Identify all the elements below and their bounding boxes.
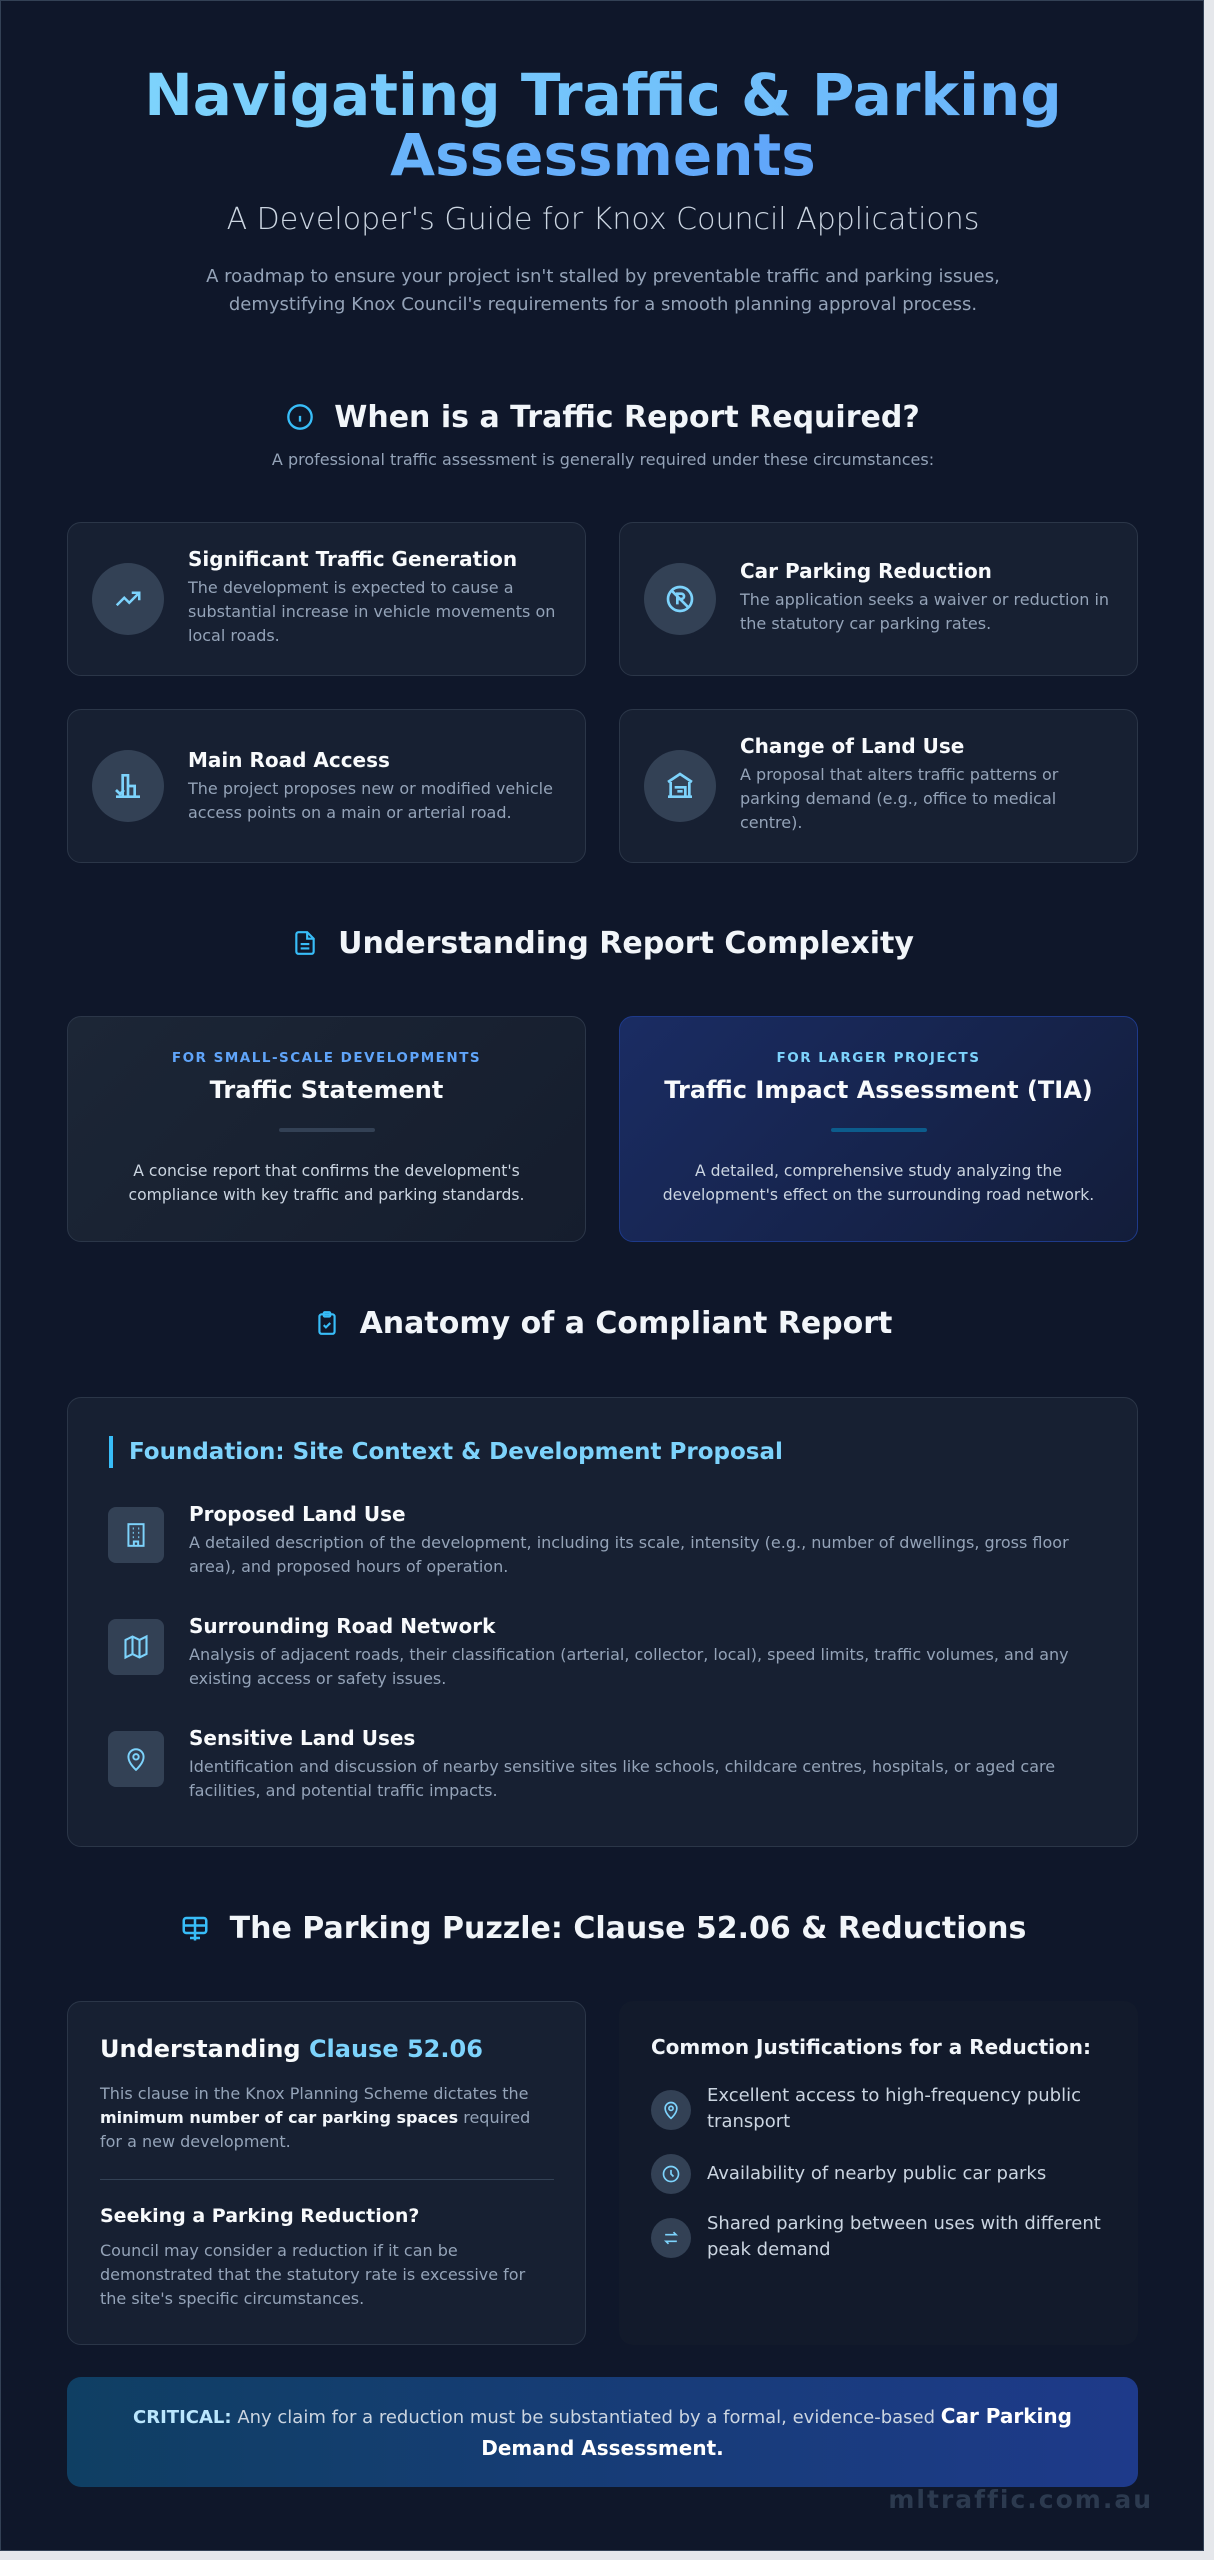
watermark: mltraffic.com.au (888, 2485, 1153, 2514)
panel: traffic impact assessment (619, 1016, 1138, 1242)
heading: when is a traffic report required: When is a Traffic Report Required? (334, 400, 920, 434)
justification: shared parking: Shared parking between uses with different peak demand (707, 2213, 1101, 2260)
icon: building (644, 750, 716, 822)
title (144, 61, 1062, 189)
item: surrounding road network: Surrounding Road Network (189, 1614, 495, 1638)
subtitle: A Developer's Guide for Knox Council Applications (227, 202, 979, 237)
panel: traffic impact assessment: development's effect on the surrounding road network. (663, 1186, 1094, 1204)
panel: foundation (67, 1397, 1138, 1847)
panel: traffic impact assessment: FOR LARGER PROJECTS (776, 1050, 980, 1066)
panel: traffic statement: Traffic Statement (210, 1076, 443, 1104)
card: change of land use: A proposal that alters traffic patterns or parking demand (e.g., office to medical centre). (740, 765, 1058, 832)
card: significant traffic generation: Significant Traffic Generation (188, 547, 517, 571)
panel: traffic statement: A concise report that confirms the development's (133, 1162, 520, 1180)
icon: trend (92, 563, 164, 635)
item: sensitive land uses: Identification and discussion of nearby sensitive sites like schools, childcare centres, hospitals, or aged care facilities, and potential traffic impacts. (189, 1757, 1055, 1800)
card: main road access: The project proposes new or modified vehicle access points on a main or arterial road. (188, 779, 553, 822)
item: surrounding road network: Analysis of adjacent roads, their classification (arterial, collector, local), speed limits, traffic volumes, and any existing access or safety issues. (189, 1645, 1069, 1688)
icon: no parking (644, 563, 716, 635)
panel: understanding clause 52.06 (67, 2001, 586, 2345)
card: car parking reduction (619, 522, 1138, 676)
justification: public transport: Excellent access to high-frequency public transport (707, 2085, 1081, 2132)
item: proposed land use: A detailed description of the development, including its scale, intensity (e.g., number of dwellings, gross floor area), and proposed hours of operation. (189, 1533, 1069, 1576)
item: proposed land use: Proposed Land Use (189, 1502, 406, 1526)
item: proposed land use (189, 1502, 1069, 1576)
title: Navigating Traffic & Parking (144, 61, 1062, 129)
item: sensitive land uses (189, 1726, 1055, 1800)
callout: critical: CRITICAL: Any claim for a reduction must be substantiated by a formal, evidence-based Car Parking Demand Assessment. (133, 2404, 1072, 2460)
icon: proposed land use (108, 1507, 164, 1563)
card: significant traffic generation (67, 522, 586, 676)
panel heading: Foundation: Site Context & Development Proposal (129, 1439, 783, 1465)
panel: traffic impact assessment: A detailed, comprehensive study analyzing the (695, 1162, 1062, 1180)
panel: understanding clause 52.06: Seeking a Parking Reduction? (100, 2205, 419, 2227)
icon: road access (92, 750, 164, 822)
callout: critical (67, 2377, 1138, 2487)
justification: public car parks: Availability of nearby public car parks (707, 2163, 1046, 2184)
item: surrounding road network (189, 1614, 1069, 1688)
panel: traffic impact assessment: Traffic Impact Assessment (TIA) (664, 1076, 1093, 1104)
icon: pin (108, 1731, 164, 1787)
card: significant traffic generation: The development is expected to cause a substantial increase in vehicle movements on local roads. (188, 578, 555, 645)
panel: traffic statement: FOR SMALL-SCALE DEVELOPMENTS (172, 1050, 481, 1066)
panel: traffic statement: compliance with key traffic and parking standards. (129, 1186, 524, 1204)
panel: understanding clause 52.06: Understanding Clause 52.06 (100, 2035, 483, 2063)
card: change of land use: Change of Land Use (740, 734, 964, 758)
panel: traffic statement (67, 1016, 586, 1242)
card: change of land use (619, 709, 1138, 863)
intro text: A roadmap to ensure your project isn't stalled by preventable traffic and parking issues, (206, 266, 1000, 287)
justification: public car parks (651, 2154, 1046, 2194)
panel: common justifications (619, 2001, 1138, 2345)
icon: map (108, 1619, 164, 1675)
card: main road access (67, 709, 586, 863)
card: main road access: Main Road Access (188, 748, 390, 772)
panel: common justifications: Common Justifications for a Reduction: (651, 2035, 1091, 2059)
intro text (206, 266, 1000, 315)
section subtext: A professional traffic assessment is generally required under these circumstances: (272, 450, 934, 469)
heading: understanding report complexity: Understanding Report Complexity (338, 926, 914, 960)
intro text: demystifying Knox Council's requirements for a smooth planning approval process. (229, 294, 977, 315)
card: car parking reduction: Car Parking Reduction (740, 559, 992, 583)
item: sensitive land uses: Sensitive Land Uses (189, 1726, 415, 1750)
heading: parking puzzle: The Parking Puzzle: Clause 52.06 & Reductions (230, 1910, 1026, 1946)
heading: anatomy of a compliant report: Anatomy of a Compliant Report (360, 1306, 892, 1340)
title: Assessments (390, 121, 816, 189)
panel: understanding clause 52.06: Council may consider a reduction if it can be demonstrated that the statutory rate is excessive for the site's specific circumstances. (100, 2241, 525, 2308)
card: car parking reduction: The application seeks a waiver or reduction in the statutory car parking rates. (740, 590, 1109, 633)
panel: understanding clause 52.06: This clause in the Knox Planning Scheme dictates the minimum number of car parking spaces required for a new development. (100, 2084, 530, 2151)
